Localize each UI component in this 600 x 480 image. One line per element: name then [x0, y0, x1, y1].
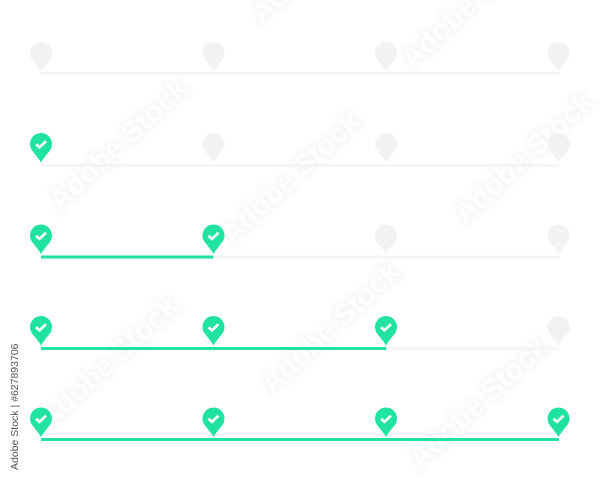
step row 1: no stops complete — [30, 42, 570, 75]
step row 3: two stops complete — [30, 225, 570, 258]
vertical stock credit: Adobe Stock | #627893706 — [9, 343, 21, 470]
step row 5: all stops complete — [30, 408, 570, 441]
step row 4: three stops complete — [30, 316, 570, 350]
step row 2: one stop complete — [30, 133, 570, 167]
